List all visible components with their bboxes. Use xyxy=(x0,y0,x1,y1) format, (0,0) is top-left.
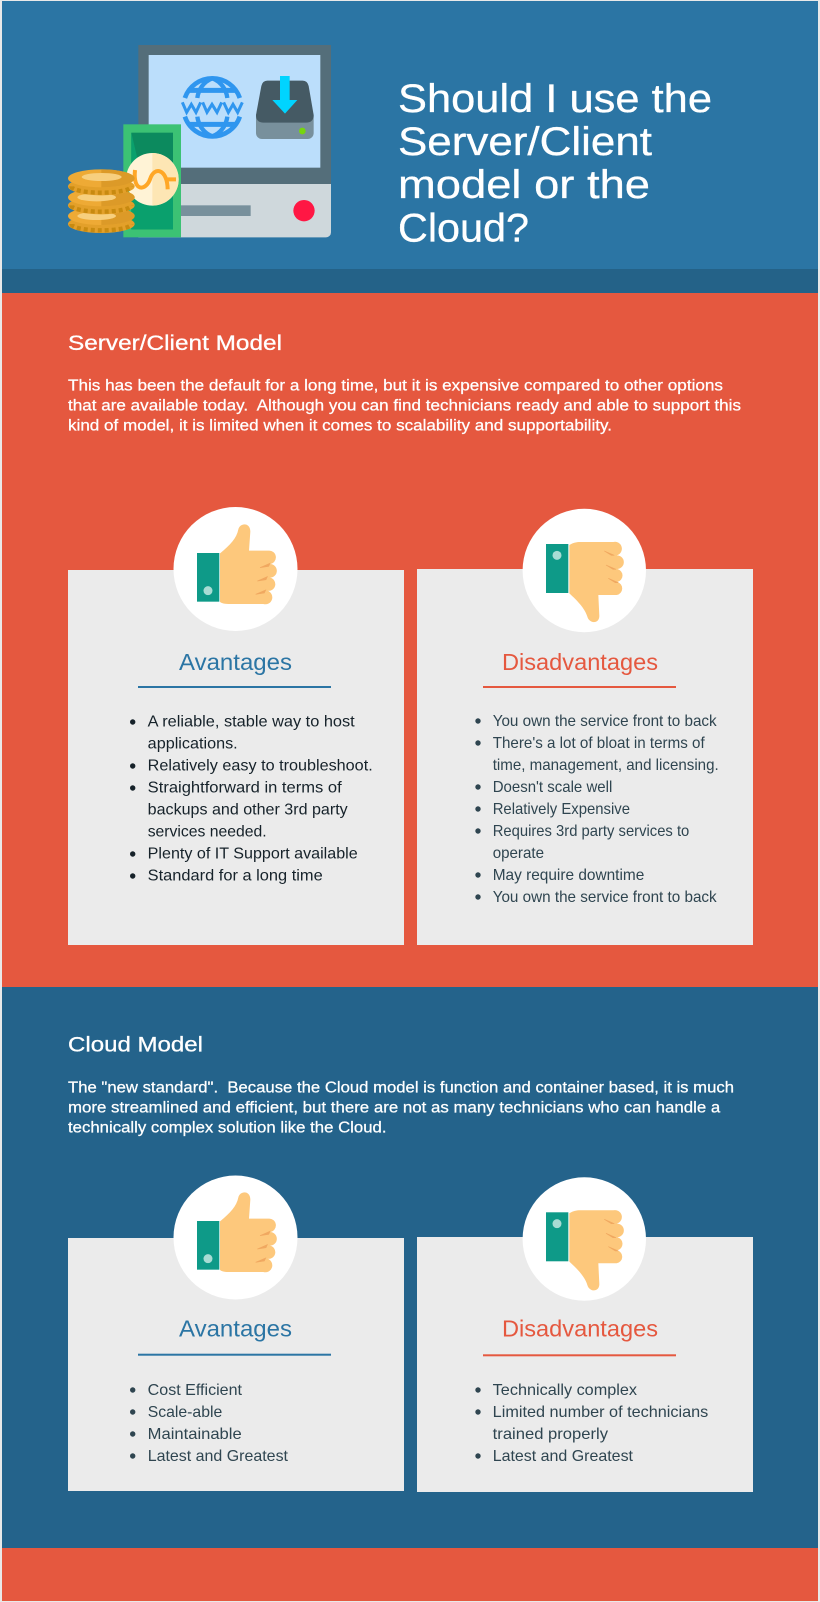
list: advantages xyxy=(130,714,373,885)
card background xyxy=(417,1237,753,1492)
text block: cloud intro: more streamlined and efficient, but there are not as many technicians who can handle a xyxy=(68,1100,721,1117)
list: advantages xyxy=(130,1382,289,1465)
icon: download drive xyxy=(256,76,314,139)
panel: server/client section background xyxy=(2,293,818,987)
list: disadvantages: time, management, and licensing. xyxy=(493,757,719,774)
panel: server/client advantages xyxy=(68,507,404,945)
computer base xyxy=(138,180,331,237)
card background xyxy=(68,570,404,945)
icon: thumbs up xyxy=(174,1176,298,1300)
panel: header banner xyxy=(2,1,818,270)
icon: www globe xyxy=(182,78,242,136)
list: disadvantages: Limited number of technicians xyxy=(493,1404,708,1421)
panel: cloud disadvantages xyxy=(417,1177,753,1492)
list: disadvantages: You own the service front to back xyxy=(493,889,718,906)
list: advantages: Maintainable xyxy=(148,1426,242,1443)
heading underline xyxy=(483,686,676,688)
text block: server/client intro: that are available today. Although you can find technicians ready and able to support this xyxy=(68,398,741,415)
card background xyxy=(417,569,753,945)
icon: coin stack xyxy=(68,169,135,233)
header lower band xyxy=(2,269,818,294)
title: model or the xyxy=(398,163,650,207)
heading: Avantages: Avantages xyxy=(179,1316,292,1342)
list: disadvantages xyxy=(475,713,719,906)
list: disadvantages: Relatively Expensive xyxy=(493,801,630,818)
title: Should I use the xyxy=(398,77,712,121)
list: disadvantages: There's a lot of bloat in terms of xyxy=(493,735,705,752)
text block: server/client intro xyxy=(68,378,741,435)
panel: cloud advantages xyxy=(68,1176,404,1491)
footer band xyxy=(2,1548,818,1601)
screen xyxy=(149,55,320,168)
text block: cloud intro xyxy=(68,1080,734,1137)
list: advantages: Latest and Greatest xyxy=(148,1448,289,1465)
heading: Avantages: Avantages xyxy=(179,649,292,675)
heading underline xyxy=(138,686,331,688)
list: disadvantages: May require downtime xyxy=(493,867,644,884)
monitor frame xyxy=(138,45,331,184)
panel: server/client disadvantages xyxy=(417,509,753,945)
list: advantages: Cost Efficient xyxy=(148,1382,243,1399)
list: advantages: backups and other 3rd party xyxy=(148,802,348,819)
power light xyxy=(293,200,315,221)
title xyxy=(398,77,712,250)
list: disadvantages: You own the service front to back xyxy=(493,713,718,730)
list: advantages: Relatively easy to troubleshoot. xyxy=(148,758,373,775)
heading: Server/Client Model: Server/Client Model xyxy=(68,331,282,355)
card background xyxy=(68,1238,404,1491)
panel: cloud section background xyxy=(2,987,818,1548)
list: disadvantages xyxy=(475,1382,708,1465)
list: disadvantages: Technically complex xyxy=(493,1382,637,1399)
heading underline xyxy=(483,1354,676,1356)
list: disadvantages: Requires 3rd party services to xyxy=(493,823,689,840)
icon: thumbs up xyxy=(174,507,298,631)
list: advantages: services needed. xyxy=(148,824,267,841)
list: advantages: Scale-able xyxy=(148,1404,222,1421)
heading: Disadvantages: Disadvantages xyxy=(502,1316,658,1342)
list: disadvantages: Latest and Greatest xyxy=(493,1448,634,1465)
heading: Disadvantages: Disadvantages xyxy=(502,649,658,675)
title: Cloud? xyxy=(398,206,529,250)
list: advantages: A reliable, stable way to host xyxy=(148,714,355,731)
title: Server/Client xyxy=(398,120,652,164)
heading: Cloud Model: Cloud Model xyxy=(68,1033,203,1057)
text block: cloud intro: technically complex solution like the Cloud. xyxy=(68,1120,386,1137)
slot xyxy=(178,205,251,216)
text block: cloud intro: The "new standard". Because the Cloud model is function and container based, it is much xyxy=(68,1080,734,1097)
list: advantages: applications. xyxy=(148,736,238,753)
list: disadvantages: operate xyxy=(493,845,544,862)
list: advantages: Plenty of IT Support available xyxy=(148,846,358,863)
icon: thumbs down xyxy=(523,509,646,632)
text block: server/client intro: This has been the default for a long time, but it is expensive compared to other options xyxy=(68,378,723,395)
icon: thumbs down xyxy=(523,1177,646,1301)
icon: banknote xyxy=(123,124,181,237)
list: advantages: Straightforward in terms of xyxy=(148,780,342,797)
list: disadvantages: trained properly xyxy=(493,1426,608,1443)
heading underline xyxy=(138,1354,331,1356)
list: advantages: Standard for a long time xyxy=(148,868,323,885)
text block: server/client intro: kind of model, it is limited when it comes to scalability and supportability. xyxy=(68,418,612,435)
list: disadvantages: Doesn't scale well xyxy=(493,779,612,796)
icon: computer with globe, drive, money and coins xyxy=(68,45,331,237)
